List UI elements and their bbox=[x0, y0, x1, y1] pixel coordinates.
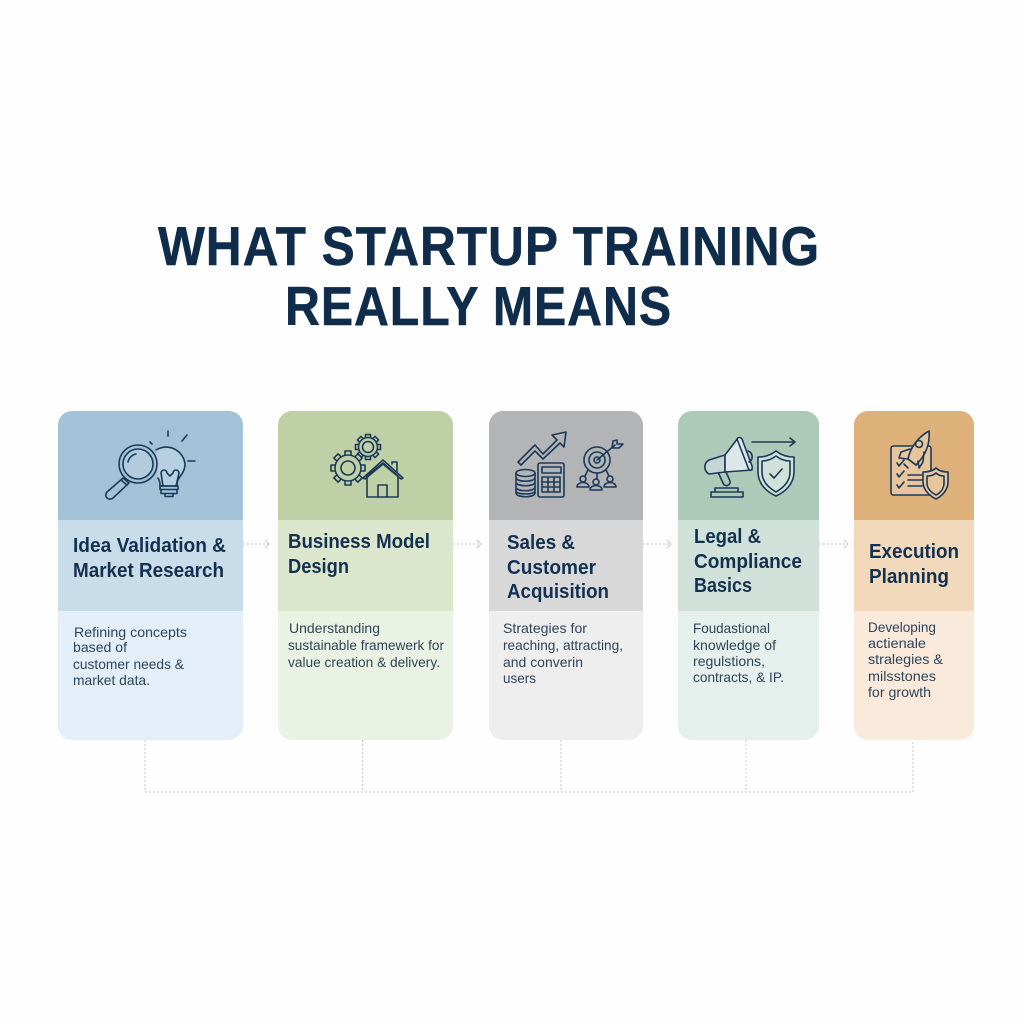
heading: Basics bbox=[694, 575, 752, 597]
description bbox=[868, 619, 944, 700]
heading: Acquisition bbox=[507, 581, 609, 603]
description: Refining concepts bbox=[74, 624, 187, 640]
description: actienale bbox=[868, 635, 926, 651]
heading: Compliance bbox=[694, 551, 802, 573]
heading: Design bbox=[288, 556, 349, 578]
heading: Execution bbox=[869, 541, 959, 563]
icon: megaphone, arrow and shield bbox=[705, 438, 795, 497]
heading: Idea Validation & bbox=[73, 535, 226, 557]
description: and converin bbox=[503, 654, 583, 670]
arrow 3 bbox=[643, 540, 671, 548]
heading: Planning bbox=[869, 566, 949, 588]
description: milsstones bbox=[868, 668, 936, 684]
panel: business model bbox=[278, 411, 453, 740]
heading bbox=[507, 532, 609, 603]
description bbox=[73, 624, 187, 688]
description: Foudastional bbox=[693, 620, 770, 636]
icon: magnifier and light bulb bbox=[106, 431, 195, 499]
description: value creation & delivery. bbox=[288, 654, 440, 670]
bottom dashed connector bbox=[145, 740, 913, 792]
description: regulstions, bbox=[693, 653, 765, 669]
arrow 2 bbox=[453, 540, 481, 548]
title bbox=[158, 215, 820, 337]
description: Understanding bbox=[289, 620, 380, 636]
description: reaching, attracting, bbox=[503, 637, 623, 653]
description: market data. bbox=[73, 672, 150, 688]
description: customer needs & bbox=[73, 656, 185, 672]
icon: checklist, rocket and shield bbox=[891, 431, 948, 499]
description: stralegies & bbox=[868, 651, 944, 667]
heading: Sales & bbox=[507, 532, 575, 554]
heading: Customer bbox=[507, 557, 596, 579]
description bbox=[288, 620, 444, 670]
panel: sales bbox=[489, 411, 643, 740]
description bbox=[693, 620, 784, 685]
arrow 4 bbox=[819, 540, 848, 548]
description: sustainable framewerk for bbox=[288, 637, 444, 653]
heading bbox=[288, 531, 430, 578]
panel: idea validation bbox=[58, 411, 243, 740]
icon: growth arrow, coins, calculator, target and people bbox=[516, 432, 623, 497]
title: REALLY MEANS bbox=[285, 275, 672, 337]
icon: gears and house bbox=[331, 434, 403, 497]
heading: Legal & bbox=[694, 526, 761, 548]
description bbox=[503, 620, 623, 686]
description: for growth bbox=[868, 684, 931, 700]
description: users bbox=[503, 670, 536, 686]
heading bbox=[869, 541, 959, 588]
description: contracts, & IP. bbox=[693, 669, 784, 685]
description: knowledge of bbox=[693, 637, 776, 653]
description: Strategies for bbox=[503, 620, 587, 636]
arrow 1 bbox=[243, 540, 269, 548]
panel: legal bbox=[678, 411, 819, 740]
heading: Business Model bbox=[288, 531, 430, 553]
title: WHAT STARTUP TRAINING bbox=[158, 215, 820, 277]
description: Developing bbox=[868, 619, 936, 635]
panel: execution bbox=[854, 411, 974, 740]
heading: Market Research bbox=[73, 560, 224, 582]
description: based of bbox=[73, 639, 127, 655]
heading bbox=[694, 526, 802, 597]
heading bbox=[73, 535, 226, 582]
